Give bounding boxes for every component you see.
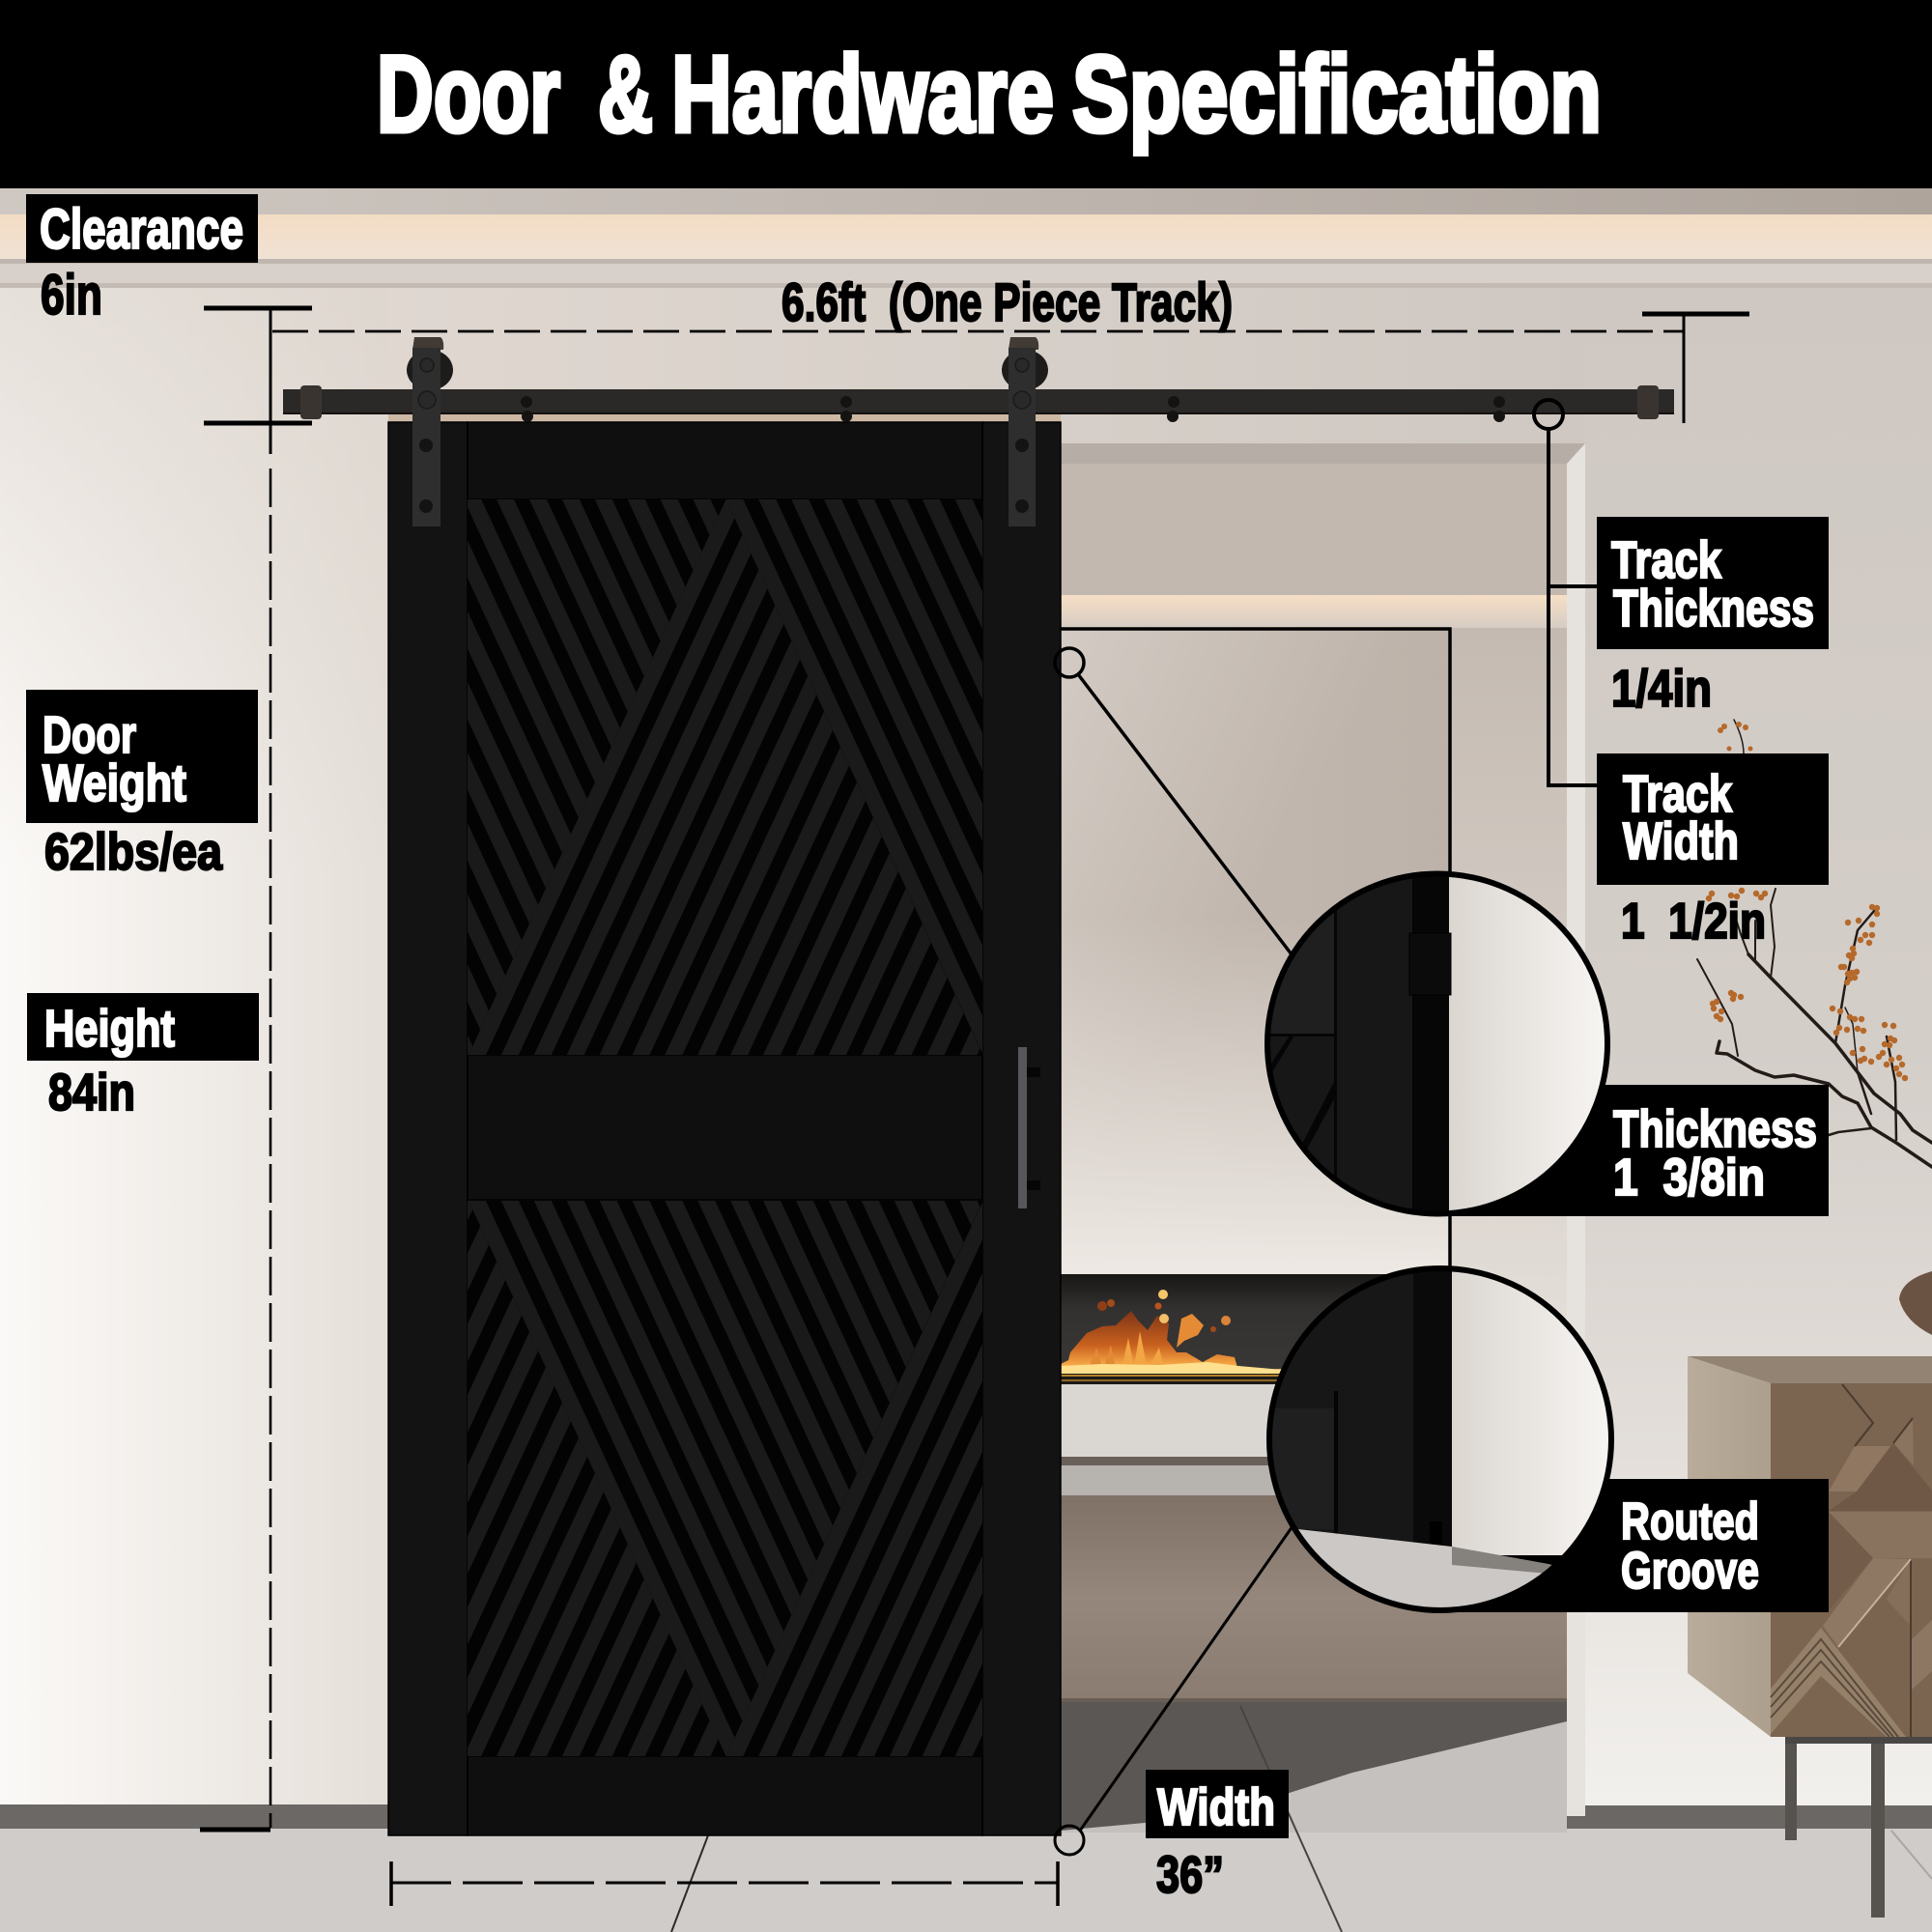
value: clearance 6in: 6in [41, 264, 102, 327]
label: width: Width [1157, 1778, 1275, 1836]
left roller hanger [407, 337, 453, 526]
title [377, 34, 1602, 155]
label: routed groove: Groove [1621, 1542, 1759, 1600]
value: width: 36” [1156, 1846, 1224, 1904]
label: clearance: Clearance [40, 198, 243, 261]
label: door weight: Door [43, 706, 136, 764]
door stiles [388, 422, 1061, 1835]
door handle [1018, 1047, 1040, 1208]
label: track thickness [1597, 517, 1829, 649]
door rails [468, 422, 982, 1835]
track end stoppers [300, 385, 1659, 419]
upper slat panel [468, 499, 982, 1055]
header bar [0, 0, 1932, 188]
label: track width [1597, 753, 1829, 885]
label: track thickness: Track [1611, 531, 1722, 589]
right wall branches [1697, 720, 1932, 1167]
value: door weight: 62lbs/ea [44, 823, 223, 881]
label: door weight: Weight [43, 754, 186, 812]
title: Hardware [671, 34, 1054, 155]
label: height: Height [44, 1000, 175, 1058]
label: thickness: Thickness [1613, 1100, 1817, 1158]
detail circle: routed groove [1256, 1265, 1623, 1623]
value: track thickness: 1/4in [1611, 660, 1712, 718]
title: & [598, 34, 653, 155]
track rail [283, 385, 1674, 422]
label: height [27, 993, 259, 1061]
detail circle: door edge thickness [1265, 869, 1613, 1217]
dimension: track length [272, 314, 1749, 423]
value: height: 84in [48, 1064, 135, 1122]
track bolts [521, 396, 1505, 422]
fireplace with flames [1061, 1274, 1447, 1384]
value: track width: 1 1/2in [1621, 894, 1766, 950]
label: routed groove: Routed [1621, 1492, 1759, 1550]
label: routed groove [1439, 1479, 1829, 1612]
label: track width: Width [1623, 812, 1739, 870]
callout leader: track [1534, 400, 1597, 785]
lower slat panel [468, 1201, 982, 1756]
track length text: 6.6ft (One Piece Track) [781, 271, 1233, 332]
label: door weight [26, 690, 258, 823]
title: Door [377, 34, 560, 155]
callout leader: door width [1055, 1526, 1293, 1855]
label: track width: Track [1623, 765, 1733, 823]
label: thickness [1439, 1085, 1829, 1216]
berries [1706, 722, 1908, 1081]
vase [1899, 1271, 1932, 1335]
sideboard cabinet [1688, 1356, 1932, 1918]
dimension: door width [391, 1861, 1058, 1906]
label: thickness: 1 3/8in [1613, 1149, 1765, 1207]
callout leader: door thickness [1055, 629, 1450, 1275]
dimension: clearance and door height [200, 308, 312, 1830]
title: Specification [1072, 34, 1602, 155]
label: track thickness: Thickness [1613, 580, 1814, 638]
right roller hanger [1002, 337, 1048, 526]
door [387, 421, 1062, 1836]
